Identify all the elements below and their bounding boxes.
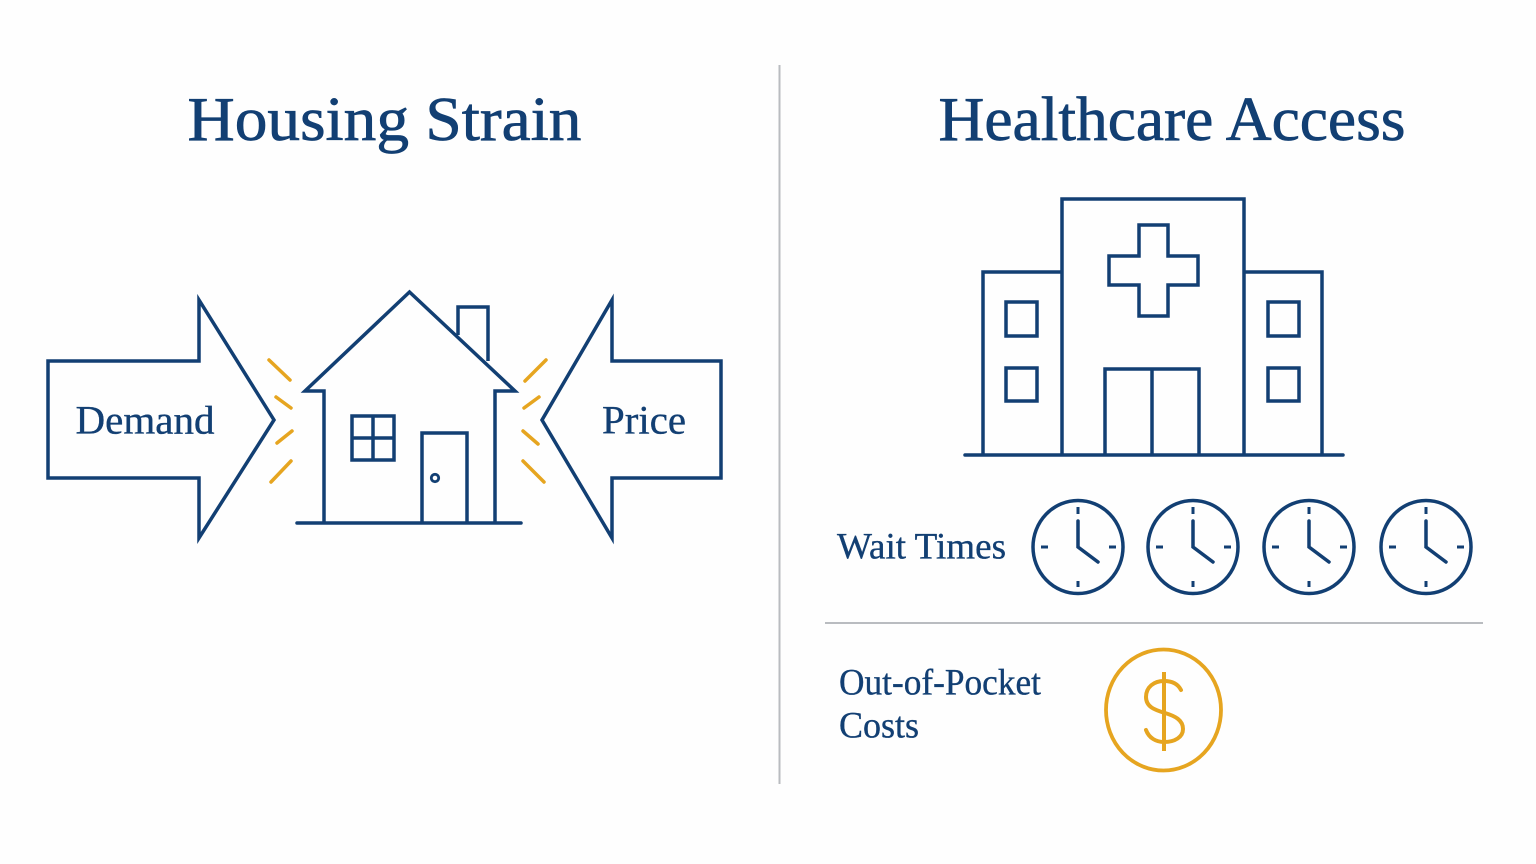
panel: healthcare access	[825, 86, 1483, 770]
arrow: demand: Demand	[76, 398, 214, 442]
icon: left impact sparks	[269, 360, 292, 482]
arrow: price: Price	[602, 398, 686, 442]
icon: clock 1	[1033, 500, 1123, 594]
label: Out-of-Pocket Costs: Out-of-Pocket	[839, 662, 1042, 704]
arrow: price	[542, 300, 721, 538]
icon: clock 4	[1381, 500, 1471, 594]
arrow: demand	[48, 300, 274, 538]
label: Out-of-Pocket Costs: Costs	[839, 706, 919, 746]
icon: hospital	[965, 199, 1343, 455]
icon: right impact sparks	[523, 360, 546, 482]
panel divider	[778, 65, 780, 784]
icon: clock 2	[1148, 500, 1238, 594]
heading: Healthcare Access: Healthcare Access	[938, 86, 1406, 154]
icon: clock 3	[1264, 500, 1354, 594]
panel: housing strain	[48, 86, 721, 538]
icon: dollar coin	[1106, 650, 1221, 770]
label: Wait Times: Wait Times	[837, 526, 1006, 568]
icon: house	[297, 292, 521, 523]
heading: Housing Strain: Housing Strain	[188, 86, 582, 154]
